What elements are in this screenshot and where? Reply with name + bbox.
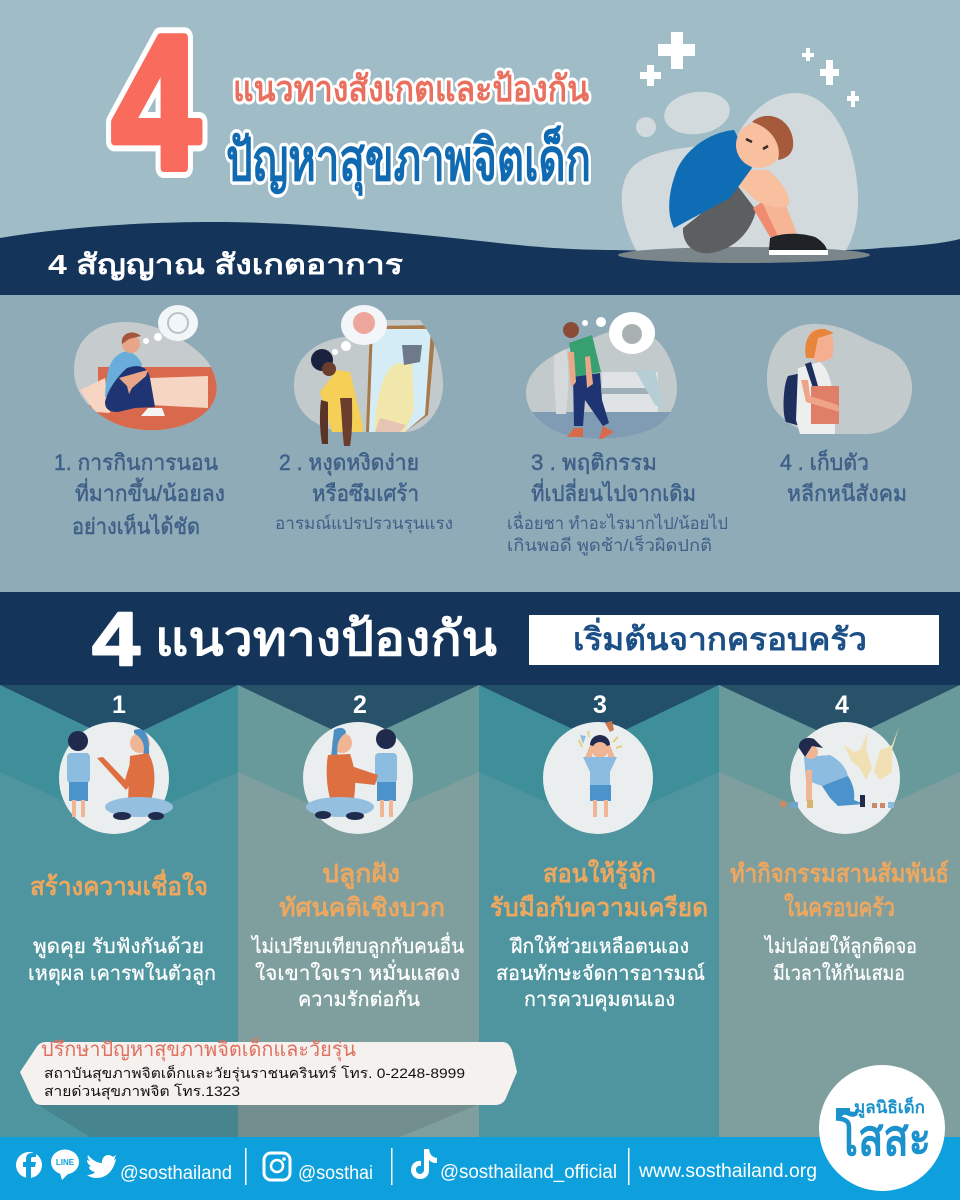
section heading: 4 signs: 4 สัญญาณ สังเกตอาการ	[48, 249, 403, 281]
sign 4 text: 4 . เก็บตัว	[780, 448, 869, 475]
icon: tiktok	[411, 1149, 437, 1179]
sign 2 text: หรือซึมเศร้า	[312, 481, 419, 506]
sign 3 text	[507, 450, 728, 556]
step numbers: 1	[112, 691, 126, 719]
panel: prevention column 3	[479, 685, 719, 1137]
icon: twitter	[87, 1155, 116, 1178]
title line 2: ปัญหาสุขภาพจิตเด็ก	[226, 125, 591, 197]
handle: sosthailand official: @sosthailand_official	[440, 1162, 617, 1183]
step 1 text: เหตุผล เคารพในตัวลูก	[28, 962, 216, 986]
callout: helplines: สายด่วนสุขภาพจิต โทร.1323	[44, 1083, 240, 1100]
step 2 text: ความรักต่อกัน	[298, 989, 420, 1011]
step 2 text: ปลูกฝัง	[322, 860, 400, 890]
handle: sosthailand: @sosthailand	[120, 1163, 232, 1184]
sign 1 text	[54, 450, 225, 539]
step 3 text: สอนทักษะจัดการอารมณ์	[496, 962, 705, 985]
illustration: boy on sofa	[74, 305, 217, 430]
logo: foundation: โสสะ	[835, 1108, 931, 1166]
sign 1 text: 1. การกินการนอน	[54, 450, 218, 475]
step numbers: 3	[593, 691, 607, 719]
header wave band	[0, 222, 960, 295]
header background	[0, 0, 960, 296]
prevention banner	[0, 592, 960, 685]
icon: boy talking with mother	[59, 722, 173, 834]
sign 3 text: ที่เปลี่ยนไปจากเดิม	[531, 478, 696, 506]
banner heading: แนวทางป้องกัน	[155, 613, 497, 666]
illustration: girl with backpack and books	[767, 324, 912, 434]
sign 1 text: ที่มากขึ้น/น้อยลง	[75, 478, 225, 506]
panel: prevention column 4	[719, 685, 960, 1137]
icon: line: LINE	[56, 1158, 75, 1167]
illustration: person and mirror	[290, 305, 445, 446]
step 1 text: พูดคุย รับฟังกันด้วย	[33, 936, 204, 959]
handle: sosthai: @sosthai	[298, 1163, 373, 1184]
step 3 text: สอนให้รู้จัก	[543, 858, 656, 890]
step numbers: 4	[835, 691, 849, 719]
logo: foundation: มูลนิธิเด็ก	[854, 1095, 925, 1119]
signs panel background	[0, 295, 960, 592]
sign 3 text: เฉื่อยชา ทำอะไรมากไป/น้อยไป	[507, 511, 728, 533]
panel: prevention column 2	[238, 685, 479, 1137]
step 3 text: รับมือกับความเครียด	[490, 894, 708, 922]
step 3 text	[490, 858, 708, 1012]
step numbers	[112, 691, 849, 719]
sign 3 text: เกินพอดี พูดช้า/เร็วผิดปกติ	[507, 534, 712, 556]
banner tag: เริ่มต้นจากครอบครัว	[573, 617, 867, 657]
title line 1: แนวทางสังเกตและป้องกัน	[233, 68, 589, 109]
step 3 text: ฝึกให้ช่วยเหลือตนเอง	[510, 935, 689, 958]
step 4 text	[730, 859, 949, 985]
sign 4 text: หลีกหนีสังคม	[787, 481, 907, 506]
illustration: sad boy hugging knees	[618, 88, 870, 263]
icon: line	[51, 1150, 79, 1180]
divider	[391, 1148, 392, 1185]
step numbers: 2	[353, 691, 367, 719]
icon: child playing with blocks	[780, 722, 900, 834]
step 4 text: ในครอบครัว	[784, 892, 895, 922]
callout: helplines: สถาบันสุขภาพจิตเด็กและวัยรุ่นราชนครินทร์ โทร. 0-2248-8999	[44, 1064, 465, 1082]
step 4 text: ไม่ปล่อยให้ลูกติดจอ	[763, 935, 917, 959]
step 1 text: สร้างความเชื่อใจ	[30, 869, 208, 901]
icon: facebook	[16, 1152, 42, 1178]
sign 3 text: 3 . พฤติกรรม	[531, 450, 657, 475]
big number 4: 4	[112, 0, 200, 209]
sign 1 text: อย่างเห็นได้ชัด	[72, 512, 200, 539]
icon: instagram	[264, 1153, 290, 1180]
divider	[628, 1148, 630, 1185]
step 1 text	[28, 869, 216, 986]
step 2 text: ทัศนคติเชิงบวก	[279, 894, 445, 922]
sign 2 text: 2 . หงุดหงิดง่าย	[279, 450, 419, 476]
panel: prevention column 1	[0, 685, 238, 1137]
banner tag	[529, 615, 939, 665]
step 2 text: ใจเขาใจเรา หมั่นแสดง	[255, 959, 460, 985]
step 3 text: การควบคุมตนเอง	[524, 989, 675, 1012]
icon: mother comforting boy	[303, 722, 413, 834]
sign 2 text: อารมณ์แปรปรวนรุนแรง	[275, 514, 453, 534]
logo: foundation	[819, 1065, 945, 1191]
icon: white crosses	[640, 32, 859, 107]
step 4 text: มีเวลาให้กันเสมอ	[773, 962, 905, 985]
banner number 4: 4	[92, 597, 140, 682]
footer bar	[0, 1137, 960, 1200]
icon: stressed boy covering ears	[543, 721, 653, 834]
callout: helplines	[20, 1036, 517, 1137]
sign 4 text	[780, 448, 907, 506]
callout: helplines: ปรึกษาปัญหาสุขภาพจิตเด็กและวัยรุ่น	[41, 1036, 356, 1062]
illustration: tired walking boy	[526, 312, 677, 439]
sign 2 text	[275, 450, 453, 534]
step 2 text	[250, 860, 464, 1011]
step 2 text: ไม่เปรียบเทียบลูกกับคนอื่น	[250, 932, 464, 959]
big number 4: 4	[112, 0, 200, 209]
divider	[245, 1148, 246, 1185]
website: www.sosthailand.org	[638, 1161, 817, 1182]
